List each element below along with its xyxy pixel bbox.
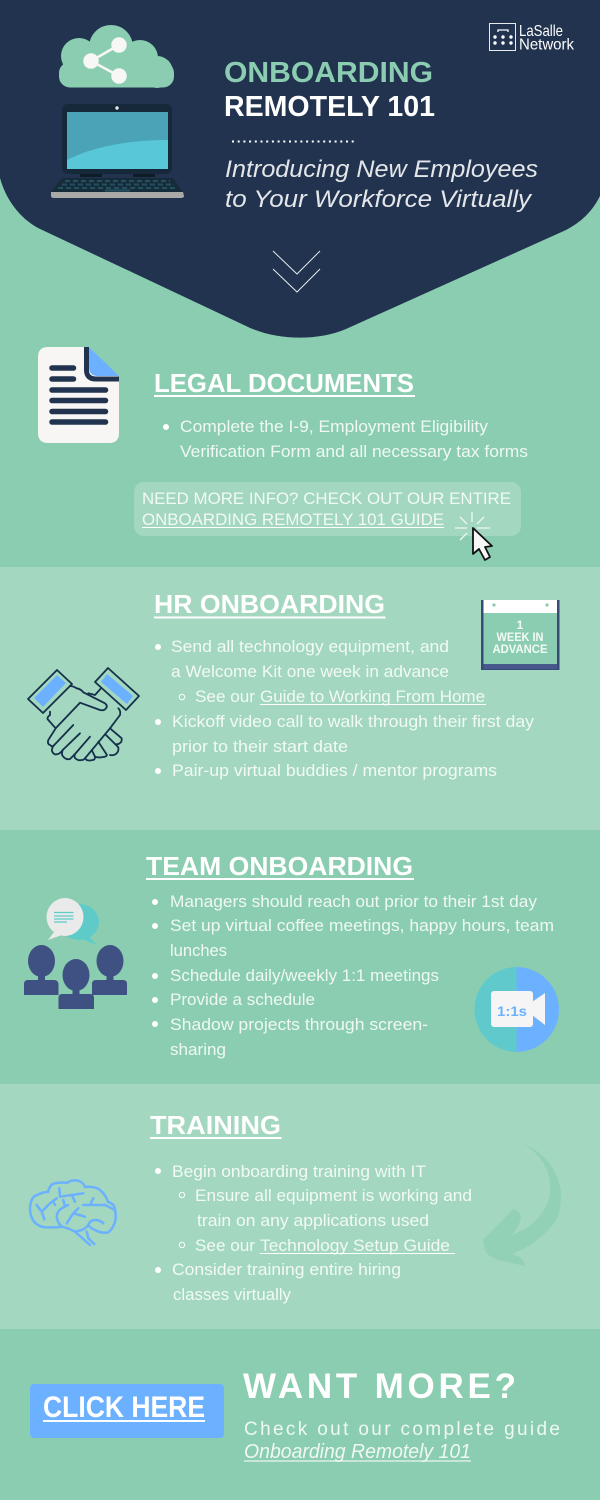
icon: document [38,347,119,443]
title [224,57,435,123]
text: complete guide: Onboarding Remotely 101 [244,1441,471,1463]
callout: more info: ONBOARDING REMOTELY 101 GUIDE [142,510,444,529]
subtitle: Introducing New Employees [225,156,538,183]
heading: legal documents: LEGAL DOCUMENTS [154,368,414,398]
bullet list: training: classes virtually [173,1285,291,1304]
bullet list: training: See our [195,1236,255,1255]
bullet list: HR: Send all technology equipment, and [171,637,449,656]
icon: 1:1s video camera [474,967,559,1052]
bullet list: team: Shadow projects through screen- [170,1015,428,1034]
bullet list: training: Begin onboarding training with IT [172,1162,426,1181]
heading: team onboarding: TEAM ONBOARDING [146,851,413,881]
bullet list: training: Technology Setup Guide [260,1236,450,1255]
bullet list: HR: See our [195,687,255,706]
panel: training [0,1084,600,1329]
icon: calendar [481,600,560,670]
title: ONBOARDING [224,57,433,89]
logo: LaSalle Network: LaSalle [519,23,563,40]
panel: header [0,0,600,338]
icon: click sparkle and cursor [455,512,492,560]
icon: calendar: 1 [517,618,524,632]
bullet list: HR [155,637,535,780]
icon: brain [30,1180,116,1245]
icon: calendar: ADVANCE [492,642,548,656]
title: REMOTELY 101 [224,91,435,123]
icon: handshake [28,668,139,760]
panel: legal documents [38,347,528,560]
text: complete guide: Check out our complete guide [244,1419,560,1440]
panel: call to action [30,1367,560,1463]
heading: training: TRAINING [150,1110,281,1140]
arrow: double chevron [273,251,320,292]
bullet list: training: Consider training entire hiring [172,1260,401,1279]
bullet list: team: Provide a schedule [170,990,315,1009]
bullet list: team: Schedule daily/weekly 1:1 meetings [170,966,439,985]
panel: HR onboarding [0,567,600,830]
bullet list: legal: Complete the I-9, Employment Eligibility [180,417,488,436]
icon: laptop [51,104,184,198]
icon: 1:1s video camera: 1:1s [497,1003,527,1019]
bullet list: training [155,1162,472,1304]
header banner shape [0,0,600,338]
heading: HR onboarding: HR ONBOARDING [154,589,385,619]
button: click here [30,1384,224,1438]
bullet list: team [152,892,554,1059]
bullet list: HR: Guide to Working From Home [260,687,485,706]
subtitle [225,156,538,213]
bullet list: training: Ensure all equipment is working and [195,1186,472,1205]
logo: LaSalle Network [490,23,575,54]
bullet list: team: Set up virtual coffee meetings, happy hours, team [170,916,554,935]
bullet list: HR: Pair-up virtual buddies / mentor programs [172,761,497,780]
dotted divider [232,140,357,142]
subtitle: to Your Workforce Virtually [225,186,533,213]
text: complete guide [244,1419,560,1463]
bullet list: legal: Verification Form and all necessary tax forms [180,442,528,461]
bullet list: team: lunches [170,941,227,960]
icon: cloud share [59,25,174,88]
bullet list: HR: Kickoff video call to walk through their first day [172,712,535,731]
bullet list: team: sharing [170,1040,226,1059]
icon: team with speech bubbles [24,898,127,1009]
logo: LaSalle Network: Network [519,36,575,54]
bullet list: HR: prior to their start date [172,737,348,756]
heading: want more: WANT MORE? [243,1367,516,1406]
arrow: curved decorative [483,1144,561,1266]
button: click here: CLICK HERE [43,1391,205,1424]
callout: more info [134,482,521,536]
bullet list: HR: a Welcome Kit one week in advance [171,662,449,681]
icon: calendar: WEEK IN [496,630,544,644]
bullet list: team: Managers should reach out prior to their 1st day [170,892,537,911]
bullet list: legal [163,417,528,461]
bullet list: training: train on any applications used [197,1211,429,1230]
panel: team onboarding [24,851,559,1059]
callout: more info: NEED MORE INFO? CHECK OUT OUR ENTIRE [142,489,511,508]
